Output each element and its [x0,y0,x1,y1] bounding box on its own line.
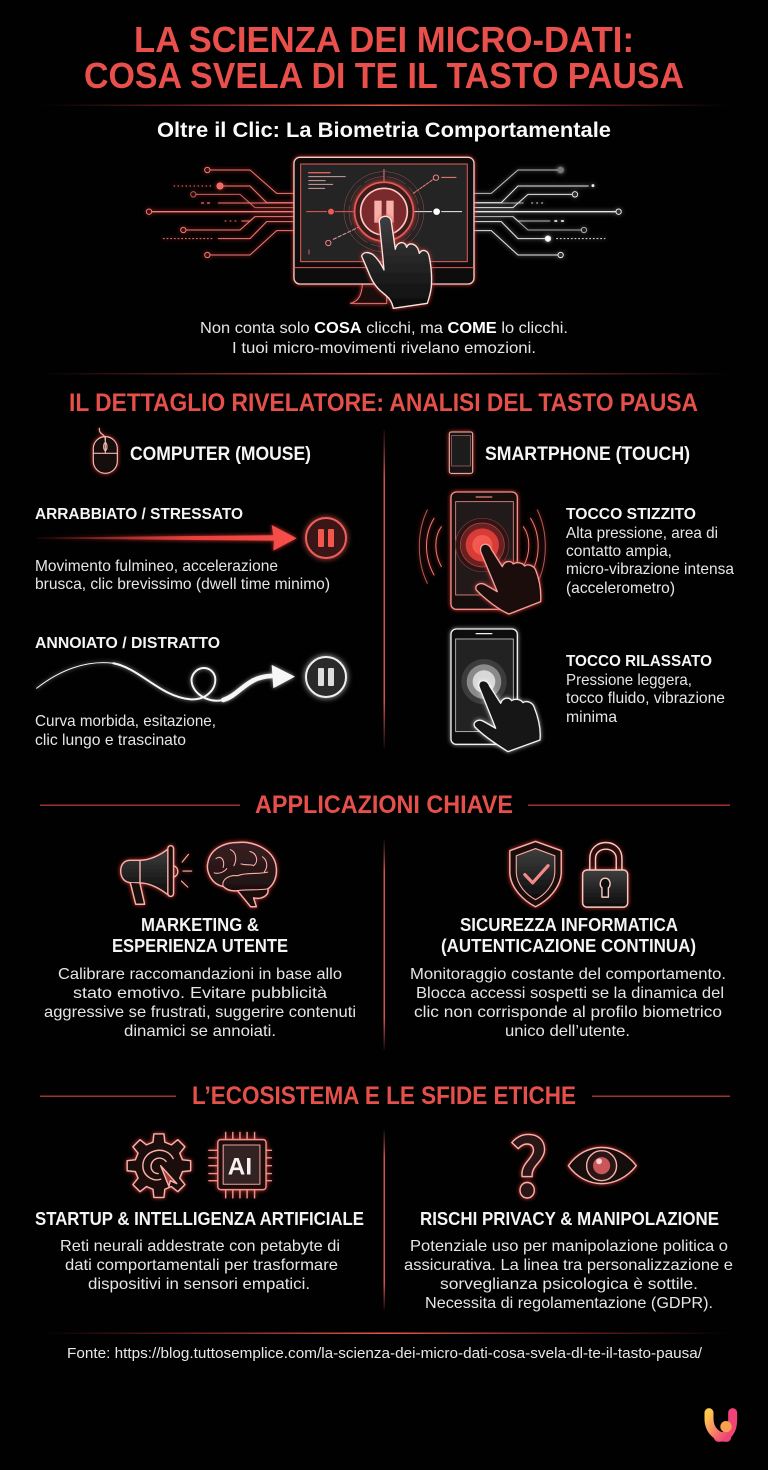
text: tocco stizzito: Alta pressione, area di [566,525,718,542]
pause button [344,172,424,252]
panel: computer mouse [35,428,346,749]
text: rischi body: sorveglianza psicologica è sottile. [440,1276,698,1293]
text: startup body [60,1238,340,1293]
text: sicurezza body: clic non corrisponde al profilo biometrico [414,1004,722,1021]
icon: question mark: ? [508,1104,548,1221]
illustration: monitor with pause button and circuit lines [146,157,621,308]
text: rischi body: Necessita di regolamentazione (GDPR). [425,1295,713,1312]
icon: brain [207,842,276,907]
text: marketing body: aggressive se frustrati, suggerire contenuti [44,1004,356,1021]
text: marketing body: Calibrare raccomandazioni in base allo [58,966,342,983]
icon: eye [568,1147,636,1184]
hand [362,216,432,308]
heading: sicurezza [441,915,696,956]
intro text [200,320,568,357]
text: sicurezza body: unico dell’utente. [505,1023,630,1040]
icon: phone with intense touch [419,492,545,614]
panel: rischi [404,1104,733,1312]
text: tocco rilassato: tocco fluido, vibrazione [566,690,725,707]
intro text: Non conta solo COSA clicchi, ma COME lo clicchi. [200,320,568,337]
icon: megaphone [121,846,192,904]
left red circuit lines [146,167,293,258]
arrow: white wavy movement [37,663,295,701]
text: sicurezza body [410,966,726,1040]
panel: startup [35,1132,364,1293]
heading: rischi: RISCHI PRIVACY & MANIPOLAZIONE [420,1209,719,1229]
title: LA SCIENZA DEI MICRO-DATI: [134,19,634,60]
text: annoiato description: clic lungo e trascinato [35,732,186,749]
text: rischi body: assicurativa. La linea tra personalizzazione e [404,1257,733,1274]
heading: il dettaglio rivelatore: IL DETTAGLIO RIVELATORE: ANALISI DEL TASTO PAUSA [69,389,698,417]
label: annoiato: ANNOIATO / DISTRATTO [35,635,220,652]
source: Fonte: https://blog.tuttosemplice.com/la-scienza-dei-micro-dati-cosa-svela-dl-te-il-tasto-pausa/ [67,1345,703,1362]
text: arrabbiato description: Movimento fulmineo, accelerazione [35,558,278,575]
text: rischi body: Potenziale uso per manipolazione politica o [410,1238,728,1255]
panel: marketing [44,842,356,1040]
heading: smartphone: SMARTPHONE (TOUCH) [485,444,690,465]
icon: gear with cursor [127,1134,191,1197]
icon: red pause [306,518,346,558]
heading: computer: COMPUTER (MOUSE) [130,444,311,465]
title: COSA SVELA DI TE IL TASTO PAUSA [84,55,684,96]
panel: smartphone touch [419,432,734,752]
text: marketing body: dinamici se annoiati. [124,1023,276,1040]
heading: sicurezza: SICUREZZA INFORMATICA [460,915,678,935]
icon: phone with light touch [451,629,540,752]
icon: AI chip: AI [228,1153,252,1180]
heading: marketing: ESPERIENZA UTENTE [112,936,288,956]
heading: sicurezza: (AUTENTICAZIONE CONTINUA) [441,936,696,956]
monitor body [294,157,474,303]
text: tocco rilassato: TOCCO RILASSATO [566,653,712,670]
icon: mouse [93,428,117,473]
arrow: red fast movement [37,525,297,551]
icon: logo [709,1413,733,1437]
heading: marketing: MARKETING & [141,915,259,935]
label: arrabbiato: ARRABBIATO / STRESSATO [35,506,243,523]
text: rischi body [404,1238,733,1312]
text: marketing body: stato emotivo. Evitare pubblicità [73,985,327,1002]
icon: shield [510,841,561,907]
subtitle: Oltre il Clic: La Biometria Comportamentale [157,119,611,142]
text: arrabbiato description [35,558,330,593]
text: tocco rilassato: Pressione leggera, [566,672,692,689]
right white circuit lines [475,167,621,258]
text: tocco stizzito [566,506,734,597]
intro text: I tuoi micro-movimenti rivelano emozioni. [232,340,536,357]
text: tocco rilassato [566,653,725,726]
text: arrabbiato description: brusca, clic brevissimo (dwell time minimo) [35,576,330,593]
icon: white pause [306,657,346,697]
icon: smartphone [449,432,473,473]
text: sicurezza body: Monitoraggio costante del comportamento. [410,966,726,983]
text: startup body: dati comportamentali per trasformare [65,1257,338,1274]
text: startup body: dispositivi in sensori empatici. [88,1276,310,1293]
panel: sicurezza [410,841,726,1040]
heading: ecosistema: L’ECOSISTEMA E LE SFIDE ETICHE [192,1082,576,1110]
text: startup body: Reti neurali addestrate con petabyte di [60,1238,340,1255]
text: tocco stizzito: contatto ampia, [566,543,672,560]
heading: startup: STARTUP & INTELLIGENZA ARTIFICIALE [35,1209,364,1229]
text: tocco stizzito: TOCCO STIZZITO [566,506,696,523]
text: tocco stizzito: micro-vibrazione intensa [566,561,734,578]
text: annoiato description: Curva morbida, esitazione, [35,713,216,730]
text: sicurezza body: Blocca accessi sospetti se la dinamica del [416,985,724,1002]
heading: applicazioni chiave: APPLICAZIONI CHIAVE [255,791,513,819]
heading: marketing [112,915,288,956]
text: tocco stizzito: (accelerometro) [566,580,675,597]
icon: padlock [583,842,628,907]
title [84,19,684,96]
icon: AI chip [209,1132,271,1198]
text: tocco rilassato: minima [566,709,617,726]
text: annoiato description [35,713,216,749]
text: marketing body [44,966,356,1040]
screen content [307,169,462,254]
